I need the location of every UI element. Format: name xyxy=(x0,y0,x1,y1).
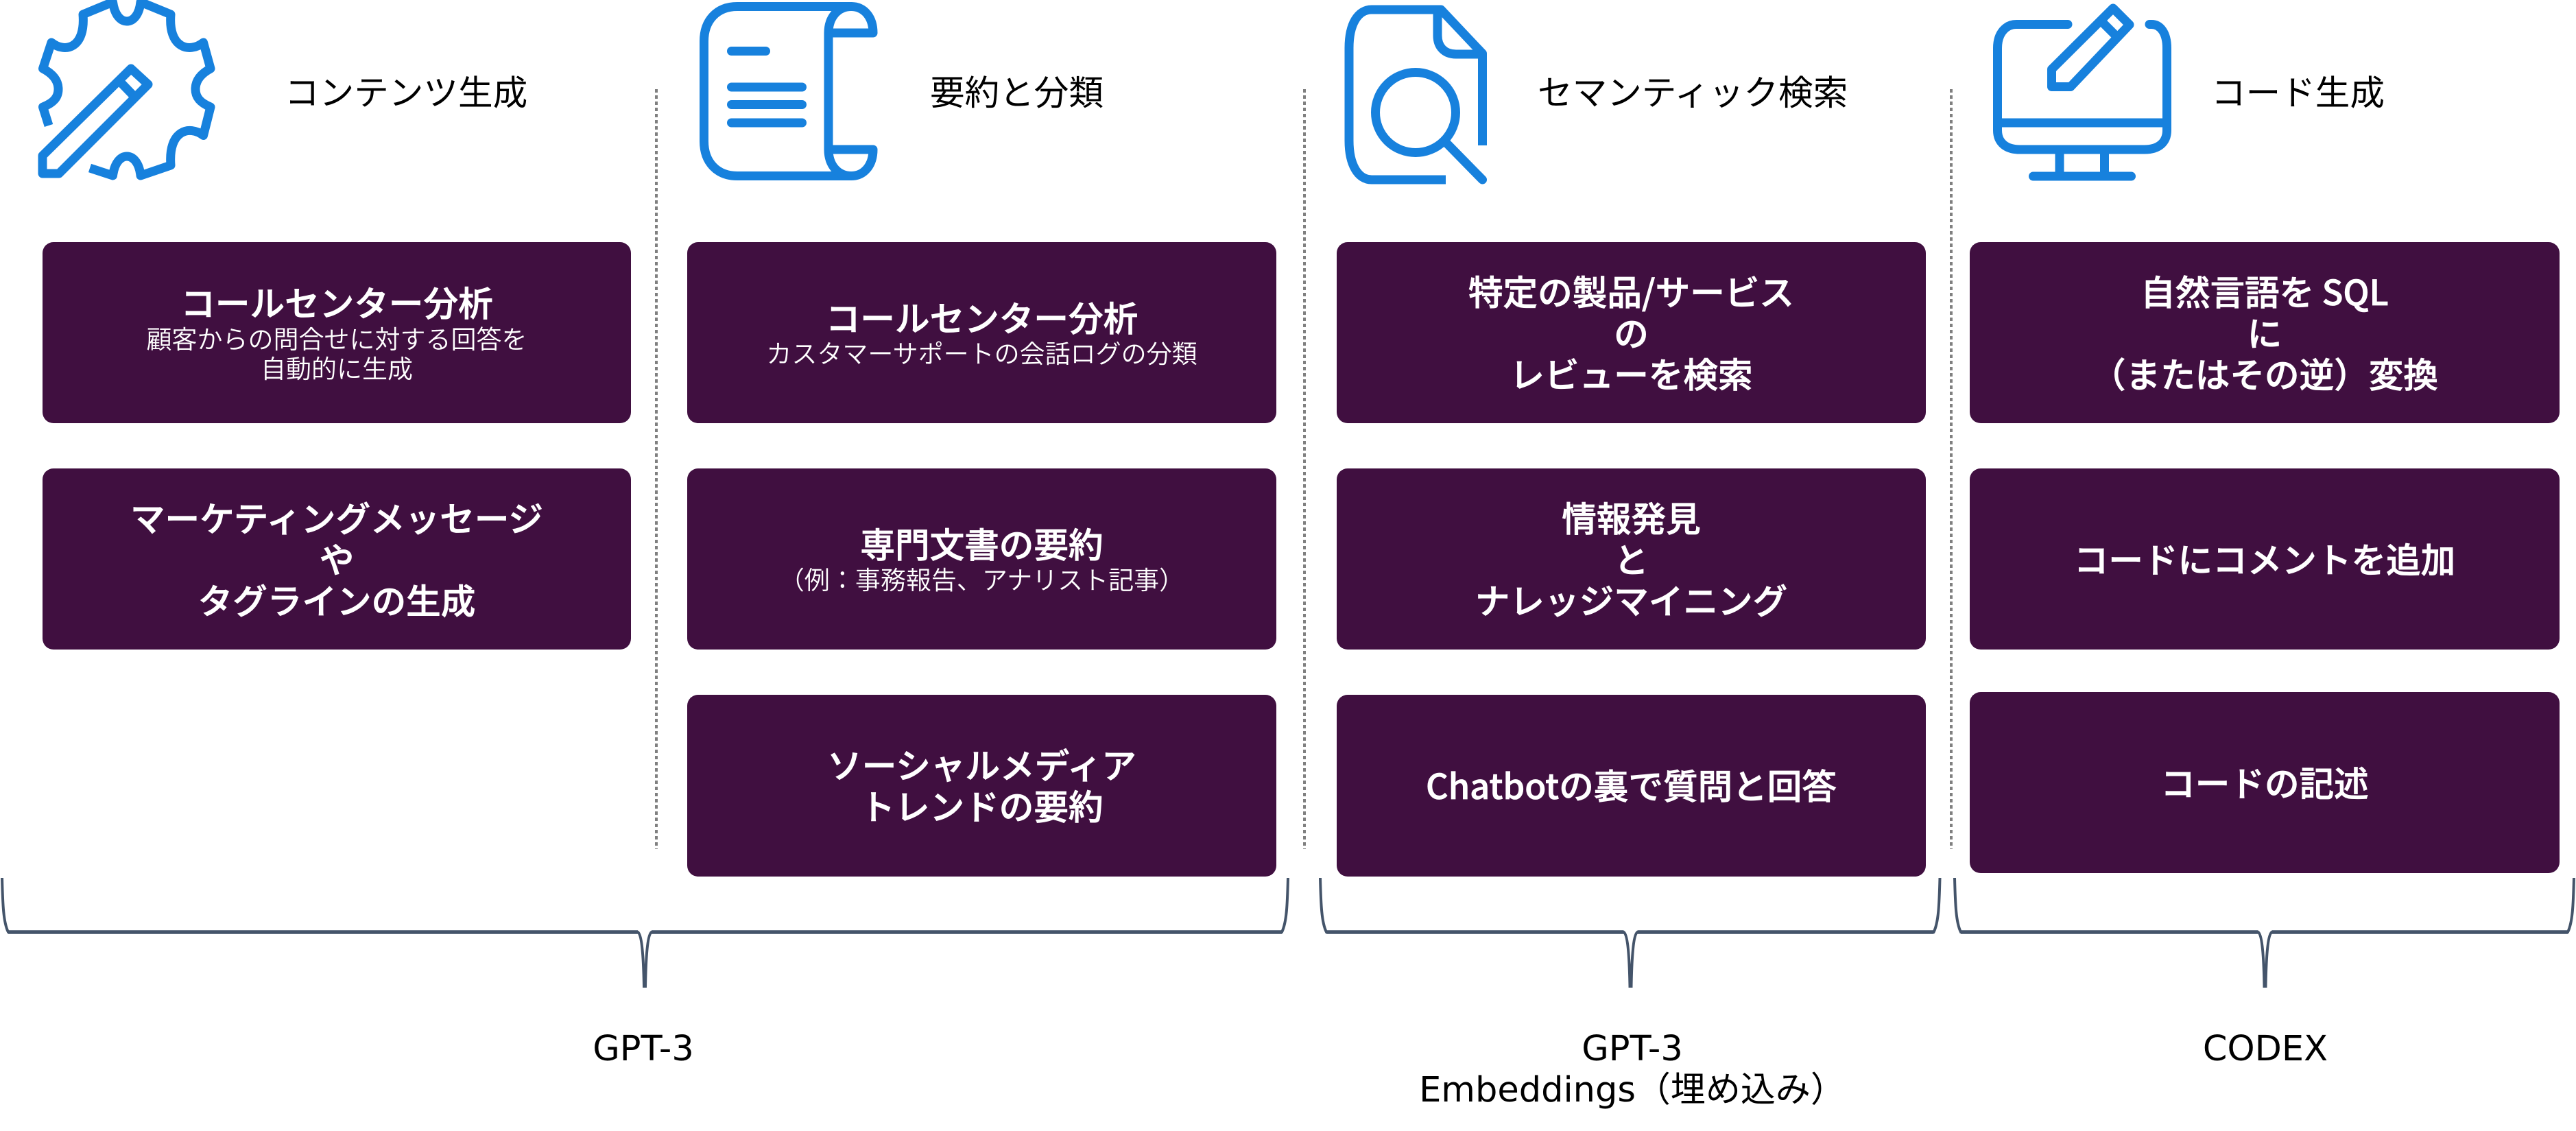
brace: GPT-3 Embeddings xyxy=(1320,878,1940,986)
card: write code xyxy=(1970,692,2560,873)
card: call center analysis (classification) xyxy=(687,242,1276,423)
label: GPT-3 Embeddings: GPT-3 xyxy=(1582,1029,1683,1069)
icon: monitor with pencil xyxy=(1997,8,2167,176)
card: product review search xyxy=(1337,242,1926,423)
card: product review search: 特定の製品/サービス xyxy=(1468,265,1794,316)
icon: scroll document xyxy=(704,7,873,176)
card: call center analysis (generation) xyxy=(43,242,631,423)
card: natural language to SQL: （またはその逆）変換 xyxy=(2091,347,2438,398)
card: call center analysis (classification): カスタマーサポートの会話ログの分類 xyxy=(766,333,1197,370)
card: call center analysis (generation): 自動的に生成 xyxy=(261,348,413,385)
card: natural language to SQL: 自然言語を SQL xyxy=(2140,265,2389,316)
card: write code: コードの記述 xyxy=(2160,756,2369,807)
card: information discovery xyxy=(1337,468,1926,650)
card: add comments to code: コードにコメントを追加 xyxy=(2074,532,2455,583)
heading: code generation: コード生成 xyxy=(2211,64,2385,115)
icon: document with magnifier xyxy=(1349,10,1483,180)
card: call center analysis (generation): コールセンター分析 xyxy=(180,276,493,326)
dotted column dividers xyxy=(656,89,1951,849)
card: product review search: レビューを検索 xyxy=(1510,347,1753,398)
label: GPT-3: GPT-3 xyxy=(593,1029,694,1069)
card: add comments to code xyxy=(1970,468,2560,650)
card: information discovery: 情報発見 xyxy=(1562,491,1701,542)
card: natural language to SQL: に xyxy=(2247,306,2282,357)
icon: gear with pencil xyxy=(43,2,211,176)
card: call center analysis (classification): コールセンター分析 xyxy=(826,291,1138,342)
label: CODEX: CODEX xyxy=(2203,1029,2328,1069)
heading: content generation: コンテンツ生成 xyxy=(285,64,527,115)
card: chatbot Q and A: Chatbotの裏で質問と回答 xyxy=(1426,759,1837,809)
label: GPT-3 Embeddings xyxy=(1419,1029,1846,1110)
card: marketing messages xyxy=(43,468,631,650)
card: information discovery: ナレッジマイニング xyxy=(1475,573,1787,624)
card: social media trends xyxy=(687,695,1276,877)
card: social media trends: ソーシャルメディア xyxy=(827,738,1136,789)
card: call center analysis (generation): 顧客からの問合せに対する回答を xyxy=(147,319,527,356)
card: product review search: の xyxy=(1614,306,1649,357)
heading: summarize and classify: 要約と分類 xyxy=(930,64,1104,115)
card: marketing messages: や xyxy=(320,532,354,583)
heading: semantic search: セマンティック検索 xyxy=(1538,64,1848,115)
card: natural language to SQL xyxy=(1970,242,2560,423)
card: chatbot Q and A xyxy=(1337,695,1926,877)
card: expert document summary: （例：事務報告、アナリスト記事） xyxy=(779,560,1184,597)
card: marketing messages: マーケティングメッセージ xyxy=(130,491,543,542)
card: expert document summary xyxy=(687,468,1276,650)
label: GPT-3 Embeddings: Embeddings（埋め込み） xyxy=(1419,1070,1846,1110)
card: marketing messages: タグラインの生成 xyxy=(198,573,475,624)
card: expert document summary: 専門文書の要約 xyxy=(860,517,1104,568)
card: social media trends: トレンドの要約 xyxy=(860,779,1104,830)
brace: CODEX xyxy=(1955,878,2574,986)
card: information discovery: と xyxy=(1614,532,1649,583)
brace: GPT-3 xyxy=(2,878,1288,986)
